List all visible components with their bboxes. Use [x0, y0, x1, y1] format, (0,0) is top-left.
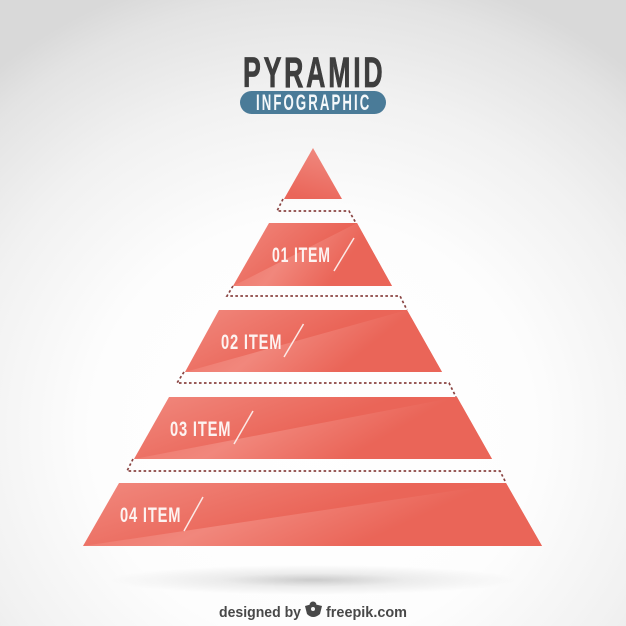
- tier: 02 item: 02 ITEM: [221, 330, 282, 354]
- connector: dashed line 4: [127, 459, 506, 483]
- credit text left: designed by: [219, 604, 302, 621]
- footer credit: [219, 602, 407, 621]
- tier: 02 item: [185, 310, 442, 372]
- subtitle text: INFOGRAPHIC: [256, 91, 371, 115]
- tier: 01 item: [233, 223, 392, 286]
- icon: freepik mascot: [305, 602, 322, 617]
- pyramid shadow: [108, 565, 518, 595]
- tier: 04 item: 04 ITEM: [120, 503, 181, 527]
- pyramid: [83, 148, 542, 546]
- subtitle pill: [240, 91, 386, 115]
- connector: dashed line 1: [277, 199, 356, 223]
- title: PYRAMID: [243, 49, 385, 97]
- connector: dashed line 2: [227, 286, 407, 310]
- tier: 04 item: [83, 483, 542, 546]
- pill background: [240, 91, 386, 114]
- credit text right: freepik.com: [326, 604, 407, 621]
- tier: 03 item: 03 ITEM: [170, 417, 231, 441]
- tier: 01 item: 01 ITEM: [272, 243, 331, 267]
- connector: dashed line 3: [177, 372, 456, 397]
- tier: 03 item: [134, 397, 492, 459]
- tier: top triangle: [284, 148, 342, 199]
